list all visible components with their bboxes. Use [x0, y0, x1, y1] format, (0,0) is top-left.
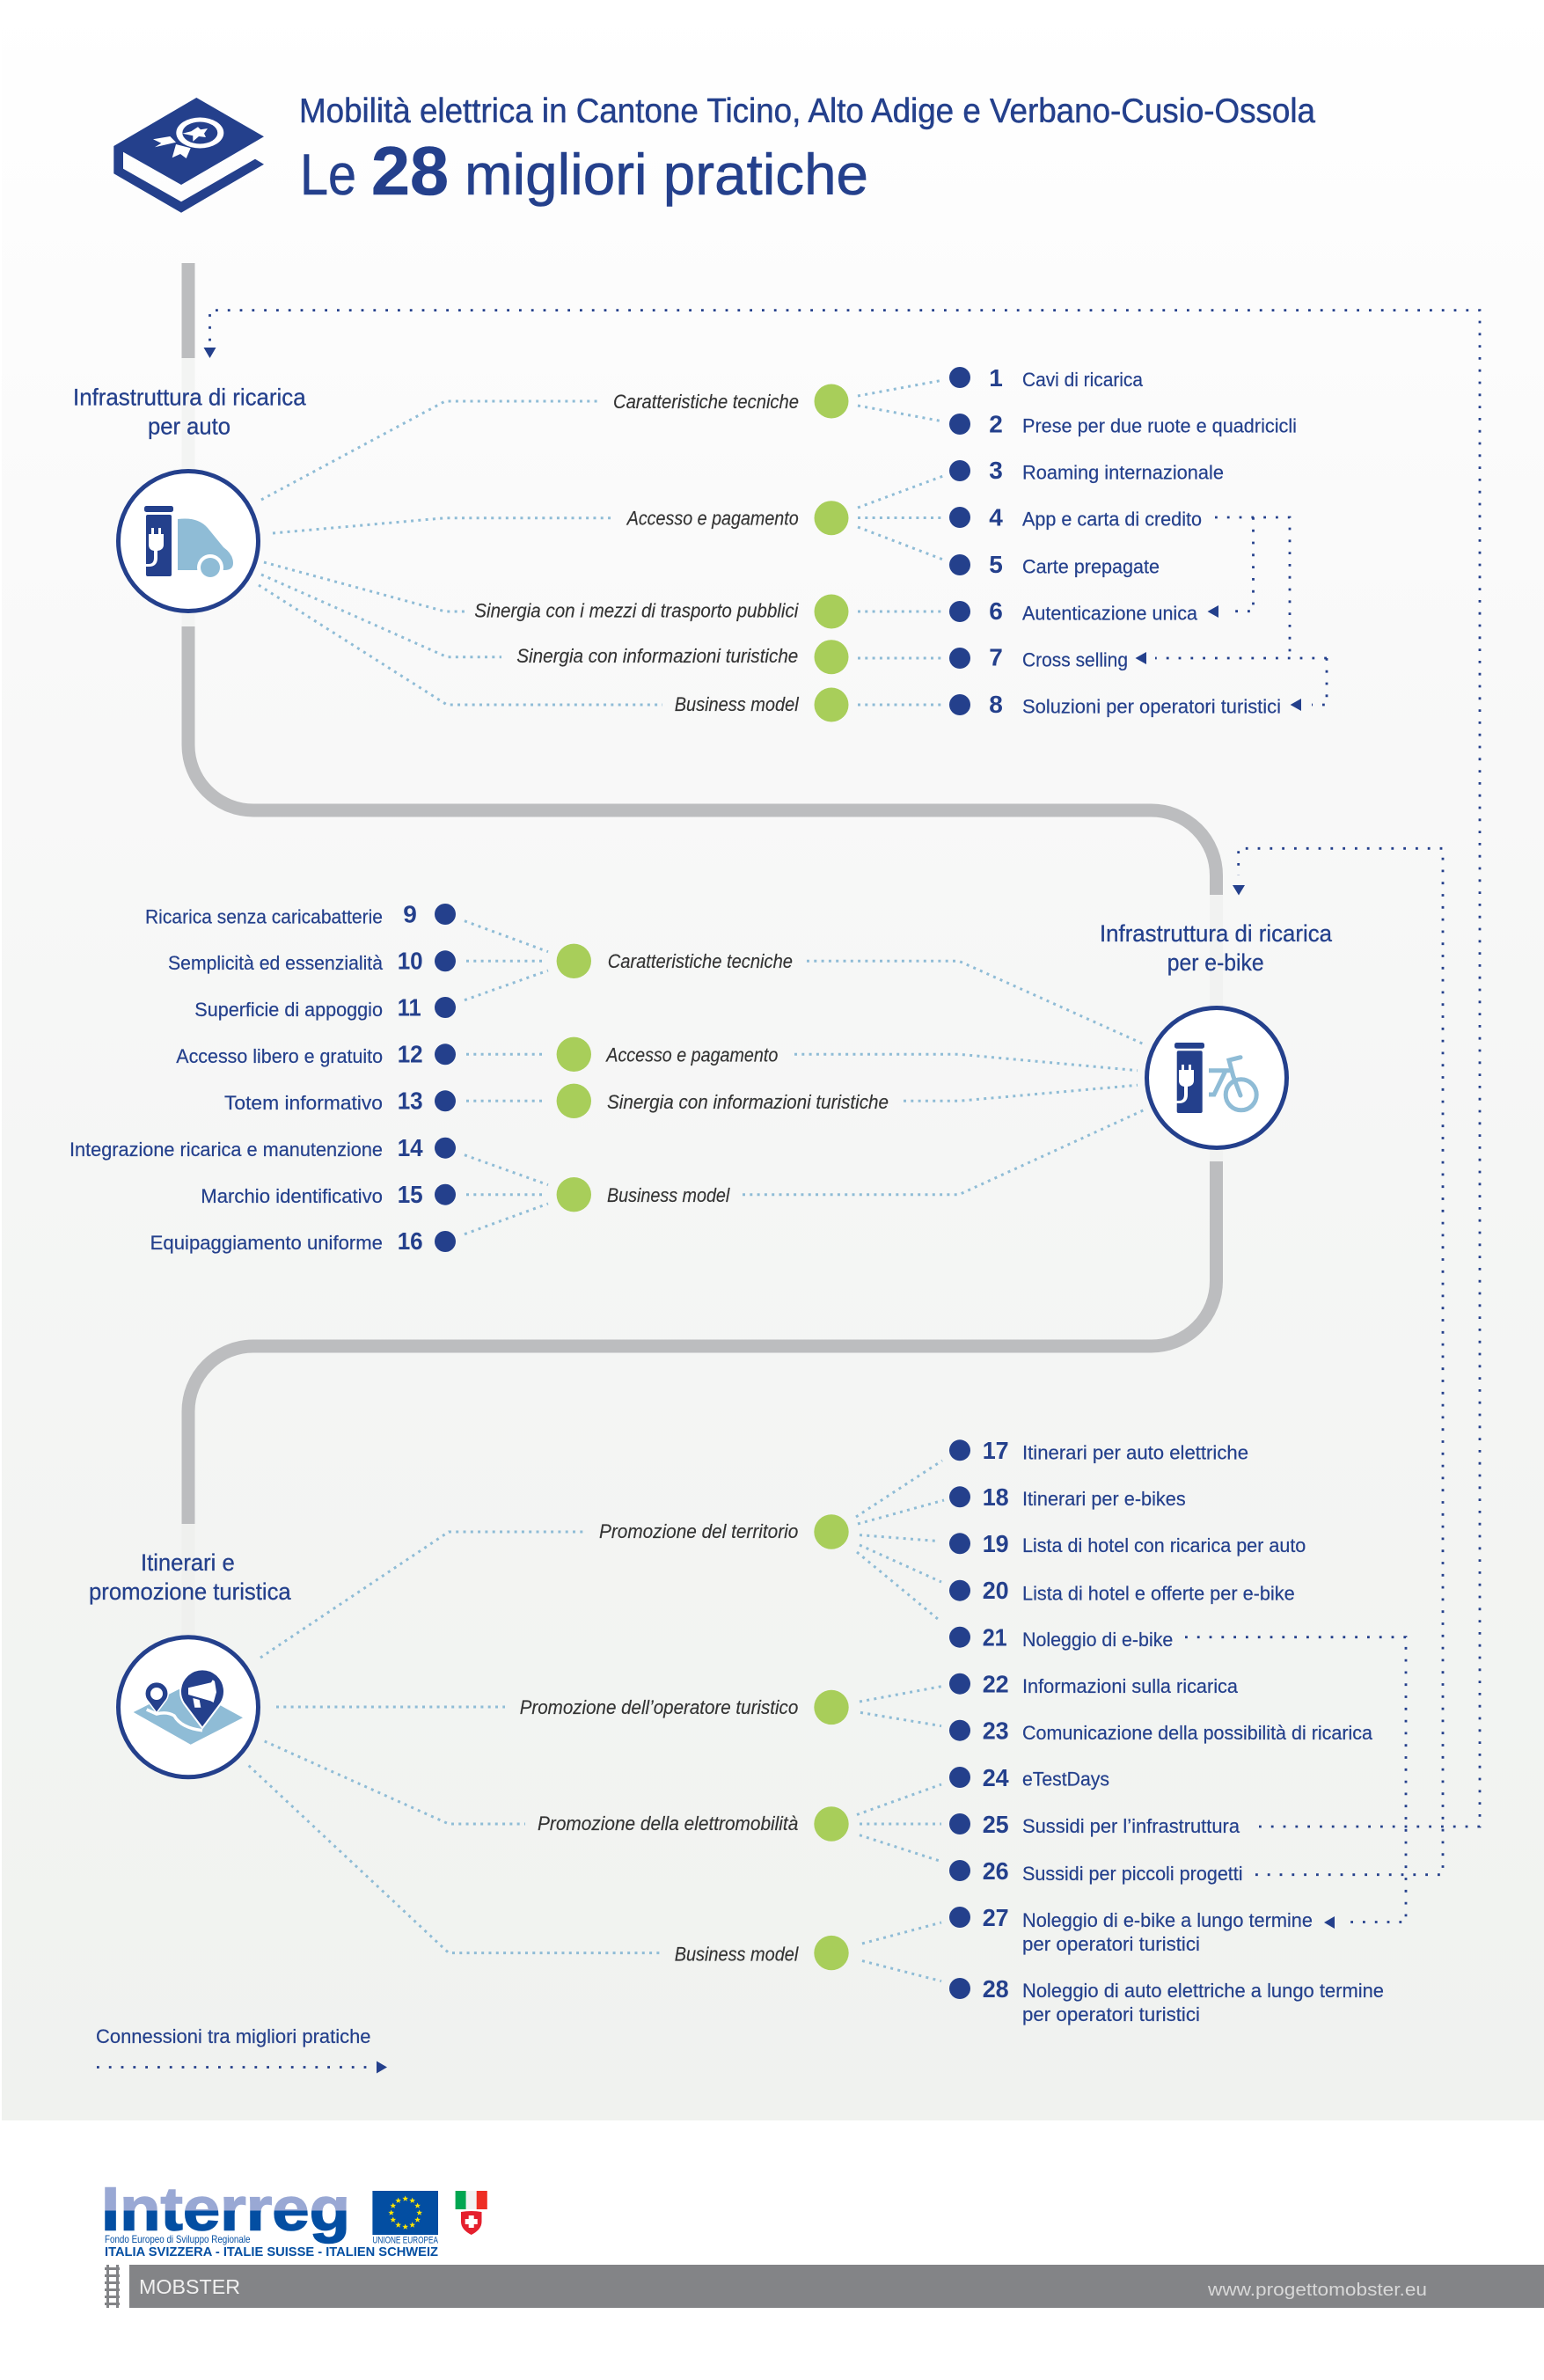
logo: EU flag: UNIONE EUROPEA [372, 2235, 438, 2245]
section 2: e-bike charging infrastructure [70, 901, 1333, 1255]
practices 17-28: 18 [983, 1483, 1009, 1511]
practices 9-16: Equipaggiamento uniforme [150, 1232, 383, 1254]
practices 17-28: Noleggio di auto elettriche a lungo termine [1022, 1980, 1384, 2002]
practices 1-8: 8 [989, 691, 1003, 718]
practices 9-16: Superficie di appoggio [194, 999, 383, 1021]
practices 17-28: 17 [983, 1437, 1009, 1464]
practices 1-8: 1 [989, 364, 1003, 392]
practices 17-28: Itinerari per auto elettriche [1022, 1441, 1248, 1463]
icon: e-bike charging [1147, 1008, 1286, 1147]
practices 1-8: Autenticazione unica [1022, 602, 1198, 624]
connector: 21 to 27 [1185, 1637, 1406, 1929]
practices 9-16: Totem informativo [224, 1092, 383, 1114]
category: Sinergia con i mezzi: Sinergia con i mezzi di trasporto pubblici [474, 600, 799, 622]
practices 17-28: 27 [983, 1904, 1009, 1931]
legend: connections between best practices: Connessioni tra migliori pratiche [96, 2025, 371, 2047]
category: Caratteristiche tecniche: Caratteristiche tecniche [613, 391, 799, 413]
logo: Interreg: Interreg [101, 2174, 350, 2243]
section heading: Infrastruttura di ricarica [73, 384, 307, 410]
practices 1-8: Cavi di ricarica [1022, 369, 1144, 391]
practices 17-28: per operatori turistici [1022, 2003, 1200, 2025]
practices 9-16: Integrazione ricarica e manutenzione [70, 1139, 383, 1161]
icon: map with pins [118, 1637, 259, 1777]
main heading: Le [300, 142, 356, 207]
practices 17-28: Noleggio di e-bike a lungo termine [1022, 1909, 1313, 1931]
long connector: 26 to section 2 [1233, 848, 1443, 1875]
practices 17-28: Sussidi per piccoli progetti [1022, 1863, 1243, 1885]
category: Business model: Business model [607, 1184, 730, 1206]
practices 1-8: App e carta di credito [1022, 508, 1202, 530]
footer bar [129, 2265, 1544, 2308]
long connector: 25 to section 1 [204, 311, 1480, 1827]
practices 17-28: Itinerari per e-bikes [1022, 1488, 1186, 1510]
icon: Swiss shield [461, 2211, 482, 2235]
category: Promozione della elettromobilità: Promozione della elettromobilità [538, 1812, 798, 1834]
category: Promozione dell'operatore turistico: Promozione dell’operatore turistico [520, 1696, 798, 1718]
practices 17-28: Lista di hotel e offerte per e-bike [1022, 1582, 1295, 1604]
practices 9-16: 15 [398, 1181, 423, 1208]
practices 17-28: 19 [983, 1530, 1009, 1557]
icon: railway track [105, 2265, 120, 2308]
section 3: itineraries and tourism promotion [89, 1437, 1384, 2025]
category: Business model: Business model [675, 1944, 799, 1966]
practices 9-16: Accesso libero e gratuito [176, 1045, 383, 1067]
footer bar: MOBSTER [139, 2275, 240, 2298]
section heading [89, 1549, 292, 1605]
practices 9-16: Ricarica senza caricabatterie [145, 905, 383, 927]
section heading [1100, 920, 1333, 976]
practices 1-8: Roaming internazionale [1022, 461, 1224, 483]
main heading: migliori pratiche [465, 142, 868, 207]
practices 1-8: 4 [989, 504, 1003, 531]
hub links [249, 1532, 662, 1953]
category: Sinergia con informazioni: Sinergia con informazioni turistiche [607, 1091, 889, 1113]
legend: connections between best practices [96, 2025, 387, 2073]
practices 17-28: 22 [983, 1670, 1009, 1698]
practices 17-28: per operatori turistici [1022, 1933, 1200, 1955]
category: Business model: Business model [675, 693, 800, 715]
practices 17-28: 25 [983, 1811, 1009, 1838]
logo: Interreg: ITALIA SVIZZERA - ITALIE SUISSE - ITALIEN SCHWEIZ [105, 2245, 438, 2259]
main heading [300, 132, 868, 209]
practices 9-16: 14 [398, 1134, 423, 1161]
title [299, 92, 1315, 209]
category: Accesso e pagamento [626, 476, 943, 560]
footer bar: www.progettomobster.eu [1207, 2281, 1427, 2300]
practices 17-28: Comunicazione della possibilità di ricarica [1022, 1722, 1373, 1744]
connectors between practices 4, 6, 7, 8 [1135, 517, 1327, 711]
main heading: 28 [371, 132, 449, 209]
category: Accesso e pagamento: Accesso e pagamento [605, 1044, 778, 1066]
practices 1-8 [949, 364, 1297, 718]
practices 9-16: 11 [398, 994, 421, 1022]
category: Sinergia con informazioni [557, 1084, 889, 1118]
practices 17-28: 28 [983, 1975, 1009, 2003]
practices 17-28: 26 [983, 1857, 1009, 1885]
category: Promozione della elettromobilità [538, 1784, 941, 1861]
practices 17-28: 21 [983, 1624, 1007, 1651]
section heading [73, 384, 307, 440]
logo: EU flag [372, 2191, 438, 2245]
practices 9-16 [70, 901, 456, 1255]
section heading: Infrastruttura di ricarica [1100, 920, 1333, 947]
icon: car charging [118, 472, 259, 611]
practices 9-16: 13 [398, 1087, 423, 1115]
practices 1-8: Prese per due ruote e quadricicli [1022, 415, 1297, 437]
section 1: car charging infrastructure [73, 364, 1327, 721]
practices 9-16: 16 [398, 1227, 423, 1255]
icon: book with medal [113, 98, 264, 213]
section heading: per auto [148, 414, 231, 440]
subtitle: Mobilità elettrica in Cantone Ticino, Alto Adige e Verbano-Cusio-Ossola [299, 92, 1315, 130]
icon: Italian flag [456, 2191, 487, 2209]
category: Caratteristiche tecniche [613, 380, 943, 421]
practices 17-28 [949, 1437, 1384, 2025]
practices 9-16: 9 [403, 901, 417, 927]
practices 9-16: 12 [398, 1041, 423, 1068]
category: Caratteristiche tecniche: Caratteristiche tecniche [608, 950, 793, 972]
practices 17-28: Informazioni sulla ricarica [1022, 1675, 1239, 1697]
category: Promozione dell'operatore turistico [520, 1687, 941, 1726]
category: Caratteristiche tecniche [557, 944, 793, 978]
practices 17-28: 23 [983, 1717, 1009, 1744]
practices 1-8: Carte prepagate [1022, 556, 1160, 578]
section heading: per e-bike [1167, 949, 1264, 976]
logo: Interreg: Fondo Europeo di Sviluppo Regionale [105, 2233, 251, 2245]
links: practices 9-16 to categories [465, 921, 548, 1234]
practices 1-8: 5 [989, 551, 1003, 578]
practices 9-16: 10 [398, 948, 423, 975]
practices 9-16: Marchio identificativo [201, 1185, 383, 1207]
practices 17-28: Lista di hotel con ricarica per auto [1022, 1534, 1306, 1556]
practices 17-28: Sussidi per l’infrastruttura [1022, 1815, 1240, 1837]
practices 17-28: Noleggio di e-bike [1022, 1629, 1173, 1651]
category: Business model [675, 688, 943, 721]
hub links [259, 401, 662, 705]
category: Business model [675, 1922, 941, 1981]
category: Accesso e pagamento [557, 1037, 778, 1072]
practices 1-8: 7 [989, 644, 1003, 671]
practices 17-28: 24 [983, 1764, 1009, 1791]
practices 17-28: 20 [983, 1577, 1009, 1604]
category: Promozione del territorio: Promozione del territorio [599, 1520, 798, 1542]
category: Sinergia con i mezzi [474, 595, 943, 628]
hub links [743, 961, 1144, 1195]
practices 9-16: Semplicità ed essenzialità [168, 952, 384, 974]
category: Promozione del territorio [599, 1461, 944, 1621]
road connecting sections [188, 263, 1217, 1637]
practices 1-8: Soluzioni per operatori turistici [1022, 696, 1281, 718]
logo: Interreg [101, 2174, 438, 2259]
footer logos [101, 2174, 487, 2259]
category: Accesso e pagamento: Accesso e pagamento [626, 508, 799, 530]
section heading: promozione turistica [89, 1578, 292, 1605]
practices 1-8: 6 [989, 597, 1003, 625]
practices 1-8: Cross selling [1022, 648, 1128, 670]
category: Sinergia con informazioni: Sinergia con informazioni turistiche [516, 645, 798, 667]
category: Sinergia con informazioni [516, 640, 943, 674]
practices 17-28: eTestDays [1022, 1769, 1109, 1790]
section heading: Itinerari e [141, 1549, 235, 1576]
category: Business model [557, 1177, 730, 1212]
practices 1-8: 3 [989, 457, 1003, 484]
practices 1-8: 2 [989, 411, 1003, 438]
